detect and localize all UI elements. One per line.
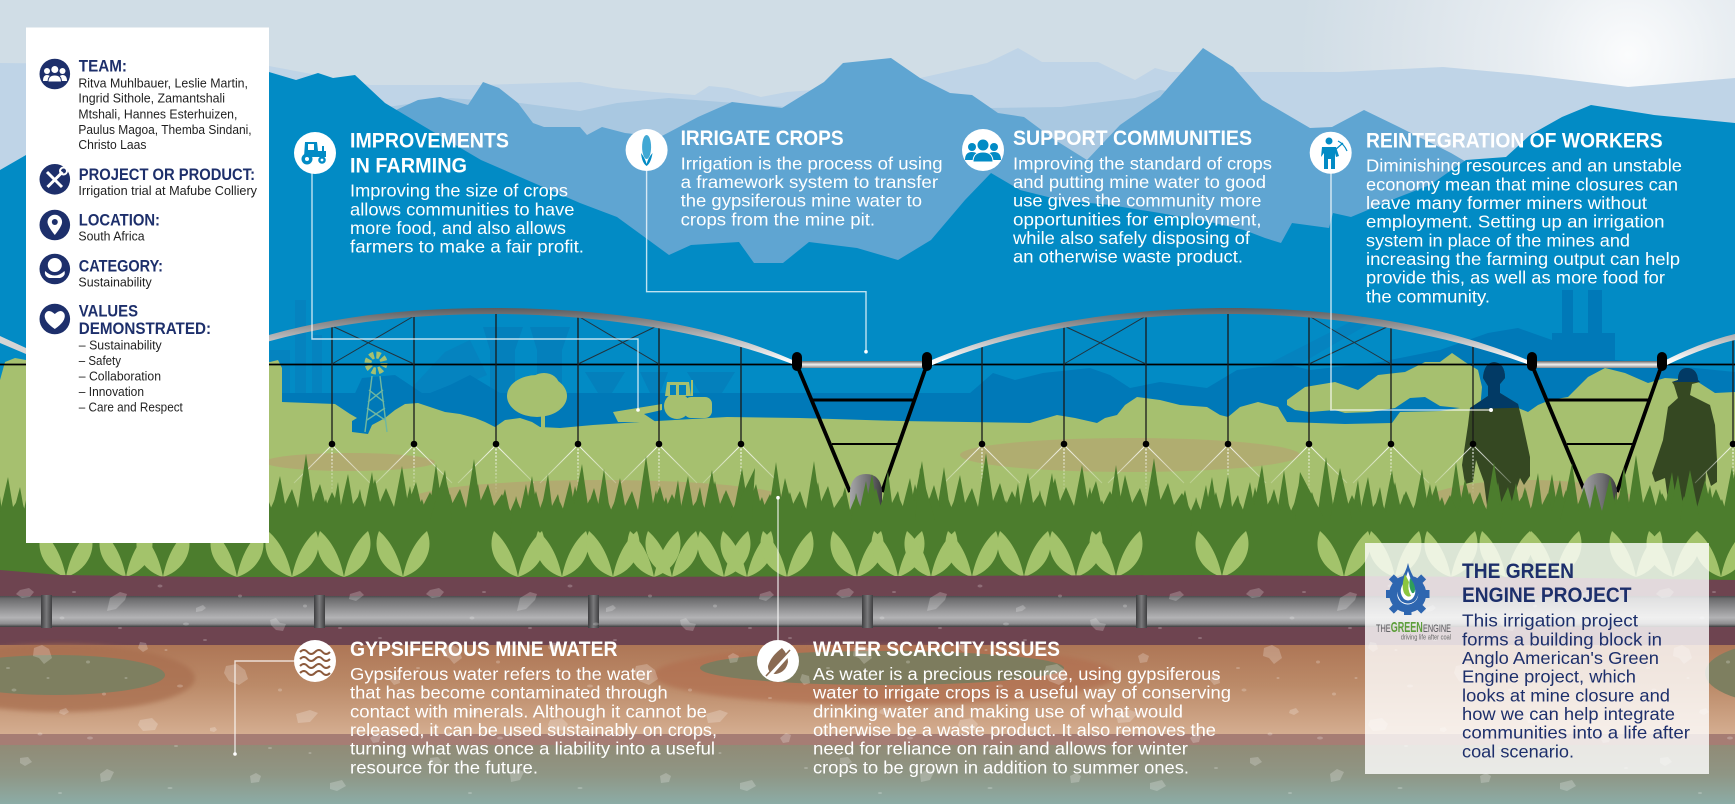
heading: IN FARMING bbox=[350, 155, 467, 178]
body text: Diminishing resources and an unstable bbox=[1366, 156, 1682, 176]
body text: economy mean that mine closures can bbox=[1366, 174, 1678, 194]
body text bbox=[350, 664, 717, 777]
team section: Ingrid Sithole, Zamantshali bbox=[78, 92, 225, 106]
body text: water to irrigate crops is a useful way of conserving bbox=[812, 683, 1231, 703]
values demonstrated section: – Safety bbox=[79, 354, 122, 368]
body text: looks at mine closure and bbox=[1462, 685, 1670, 705]
icon: corn cob bbox=[626, 129, 668, 171]
underground pipe bbox=[0, 595, 1735, 628]
body text: communities into a life after bbox=[1462, 723, 1690, 743]
values demonstrated section: DEMONSTRATED: bbox=[79, 319, 211, 338]
heading: REINTEGRATION OF WORKERS bbox=[1366, 130, 1663, 153]
centre pivot irrigation system bbox=[0, 308, 1735, 525]
body text: Engine project, which bbox=[1462, 667, 1636, 687]
icon: team bbox=[40, 59, 70, 89]
body text: farmers to make a fair profit. bbox=[350, 237, 584, 257]
project or product section: PROJECT OR PRODUCT: bbox=[79, 165, 255, 184]
callout: reintegration of workers bbox=[1310, 130, 1682, 412]
heading: WATER SCARCITY ISSUES bbox=[813, 638, 1060, 661]
body text bbox=[1012, 153, 1272, 267]
icon: crossed water drop bbox=[757, 640, 799, 682]
heading: GYPSIFEROUS MINE WATER bbox=[350, 638, 618, 661]
values demonstrated section: – Collaboration bbox=[79, 370, 161, 384]
leader line bbox=[312, 170, 638, 410]
heading: IRRIGATE CROPS bbox=[681, 127, 844, 150]
location section: South Africa bbox=[78, 230, 145, 244]
team section bbox=[40, 57, 252, 152]
heading bbox=[1462, 560, 1632, 607]
body text: provide this, as well as more food for bbox=[1366, 268, 1665, 288]
icon: tractor bbox=[294, 132, 336, 174]
nozzle drop lines bbox=[332, 313, 1733, 444]
body text: otherwise be a waste product. It also removes the bbox=[813, 720, 1216, 740]
values demonstrated section: – Innovation bbox=[79, 385, 144, 399]
body text: use gives the community more bbox=[1013, 191, 1262, 211]
distant bush cloud bbox=[1287, 353, 1482, 413]
body text: Irrigation is the process of using bbox=[681, 153, 943, 173]
tractor and plough bbox=[613, 380, 712, 422]
body text: This irrigation project bbox=[1462, 611, 1638, 631]
body text: Gypsiferous water refers to the water bbox=[350, 664, 652, 684]
callout: water scarcity issues bbox=[757, 496, 1231, 777]
body text bbox=[350, 181, 584, 257]
body text: turning what was once a liability into a useful bbox=[350, 739, 715, 759]
tree bbox=[507, 373, 567, 428]
body text: how we can help integrate bbox=[1462, 704, 1675, 724]
icon: hands holding bbox=[40, 254, 70, 284]
body text: the community. bbox=[1366, 286, 1490, 306]
dirt patches in the field bbox=[265, 438, 1640, 550]
corn leaves bbox=[39, 531, 1735, 577]
heading: SUPPORT COMMUNITIES bbox=[1013, 127, 1252, 150]
body text: opportunities for employment, bbox=[1013, 209, 1262, 229]
leader line bbox=[235, 661, 294, 754]
body text: increasing the farming output can help bbox=[1366, 249, 1680, 269]
worker silhouette right bbox=[1652, 368, 1717, 507]
heading: IMPROVEMENTS bbox=[350, 130, 509, 153]
body text bbox=[681, 153, 943, 229]
body text: an otherwise waste product. bbox=[1013, 247, 1243, 267]
tower spans bbox=[797, 361, 927, 368]
heading bbox=[350, 130, 509, 178]
body text: employment. Setting up an irrigation bbox=[1366, 212, 1664, 232]
callout: irrigate crops bbox=[626, 127, 943, 354]
project or product section: Irrigation trial at Mafube Colliery bbox=[78, 184, 258, 198]
body text: more food, and also allows bbox=[350, 218, 566, 238]
arches bbox=[192, 308, 797, 366]
body text: and putting mine water to good bbox=[1013, 172, 1266, 192]
body text: contact with minerals. Although it cannot be bbox=[350, 701, 707, 721]
leader line bbox=[647, 170, 866, 352]
leader line bbox=[1331, 172, 1491, 410]
tower legs bbox=[799, 370, 925, 492]
icon: miner bbox=[1310, 132, 1352, 174]
leader line bbox=[777, 498, 779, 640]
body text: forms a building block in bbox=[1462, 629, 1662, 649]
team section: Mtshali, Hannes Esterhuizen, bbox=[78, 107, 237, 121]
values demonstrated section bbox=[40, 302, 211, 415]
heading: ENGINE PROJECT bbox=[1462, 584, 1632, 607]
water pools bbox=[0, 644, 195, 712]
body text: that has become contaminated through bbox=[350, 683, 668, 703]
body text: released, it can be used sustainably on crops, bbox=[350, 720, 717, 740]
icon: people bbox=[962, 129, 1004, 171]
suspended cable bbox=[0, 364, 1735, 366]
heading: THE GREEN bbox=[1462, 560, 1574, 583]
body text: a framework system to transfer bbox=[681, 172, 938, 192]
underground soil layers bbox=[0, 570, 1735, 804]
body text bbox=[1462, 611, 1690, 761]
body text: coal scenario. bbox=[1462, 741, 1574, 761]
icon: water waves bbox=[294, 640, 336, 682]
middle mountain range bbox=[380, 90, 1250, 300]
team section: Christo Laas bbox=[78, 138, 146, 152]
body text: while also safely disposing of bbox=[1012, 228, 1250, 248]
cross braces bbox=[332, 316, 1391, 364]
distant mountain range bbox=[0, 48, 1735, 300]
body text: Anglo American's Green bbox=[1462, 648, 1659, 668]
logo: the green engine bbox=[1376, 563, 1451, 642]
team section: TEAM: bbox=[79, 57, 127, 76]
callout: support communities bbox=[962, 127, 1272, 267]
logo: the green engine: driving life after coal bbox=[1401, 632, 1451, 642]
category section: Sustainability bbox=[78, 276, 152, 290]
icon: heart bbox=[40, 304, 70, 334]
foreground mountain bbox=[0, 72, 1735, 450]
body text: As water is a precious resource, using gypsiferous bbox=[813, 664, 1221, 684]
near mountain range bbox=[396, 48, 1480, 320]
team section: Paulus Magoa, Themba Sindani, bbox=[78, 123, 252, 137]
tower caps bbox=[792, 352, 802, 371]
green field with bushes bbox=[0, 358, 1735, 600]
tall grass bbox=[0, 453, 1735, 584]
team section: Ritva Muhlbauer, Leslie Martin, bbox=[78, 76, 248, 90]
icon: tools bbox=[40, 164, 70, 195]
logo: the green engine: GREEN bbox=[1391, 619, 1423, 636]
callout: improvements in farming bbox=[294, 130, 640, 412]
panel: the green engine project bbox=[1365, 543, 1709, 774]
body text: crops from the mine pit. bbox=[681, 209, 875, 229]
logo: the green engine: THE bbox=[1376, 623, 1391, 635]
spray nozzles bbox=[294, 441, 370, 498]
callout: gypsiferous mine water bbox=[233, 638, 717, 777]
values demonstrated section: – Care and Respect bbox=[79, 401, 183, 415]
body text: resource for the future. bbox=[350, 757, 538, 777]
panel: project details bbox=[26, 28, 269, 543]
body text: Improving the standard of crops bbox=[1013, 153, 1272, 173]
body text: the gypsiferous mine water to bbox=[681, 191, 922, 211]
icon: map pin bbox=[40, 210, 70, 240]
wheels bbox=[850, 474, 882, 520]
worker silhouette left bbox=[1462, 362, 1530, 506]
values demonstrated section: – Sustainability bbox=[79, 338, 162, 352]
category section: CATEGORY: bbox=[79, 256, 163, 275]
windmill bbox=[365, 355, 387, 432]
body text: Improving the size of crops bbox=[350, 181, 568, 201]
blue treeline band bbox=[0, 290, 1735, 450]
body text: allows communities to have bbox=[350, 199, 574, 219]
category section bbox=[40, 254, 163, 290]
body text: system in place of the mines and bbox=[1366, 230, 1630, 250]
body text bbox=[812, 664, 1231, 777]
project or product section bbox=[40, 164, 258, 198]
factory silhouettes bbox=[270, 300, 1372, 400]
body text: need for reliance on rain and allows for winter bbox=[813, 739, 1188, 759]
body text bbox=[1366, 156, 1682, 306]
values demonstrated section: VALUES bbox=[79, 302, 138, 321]
location section bbox=[40, 210, 160, 244]
location section: LOCATION: bbox=[79, 211, 160, 230]
sky highlight bbox=[1200, 0, 1735, 400]
body text: drinking water and making use of what would bbox=[813, 701, 1183, 721]
soil speckle texture bbox=[0, 578, 1735, 804]
body text: crops to be grown in addition to summer ones. bbox=[813, 757, 1189, 777]
logo: the green engine: ENGINE bbox=[1423, 623, 1451, 635]
body text: leave many former miners without bbox=[1366, 193, 1647, 213]
